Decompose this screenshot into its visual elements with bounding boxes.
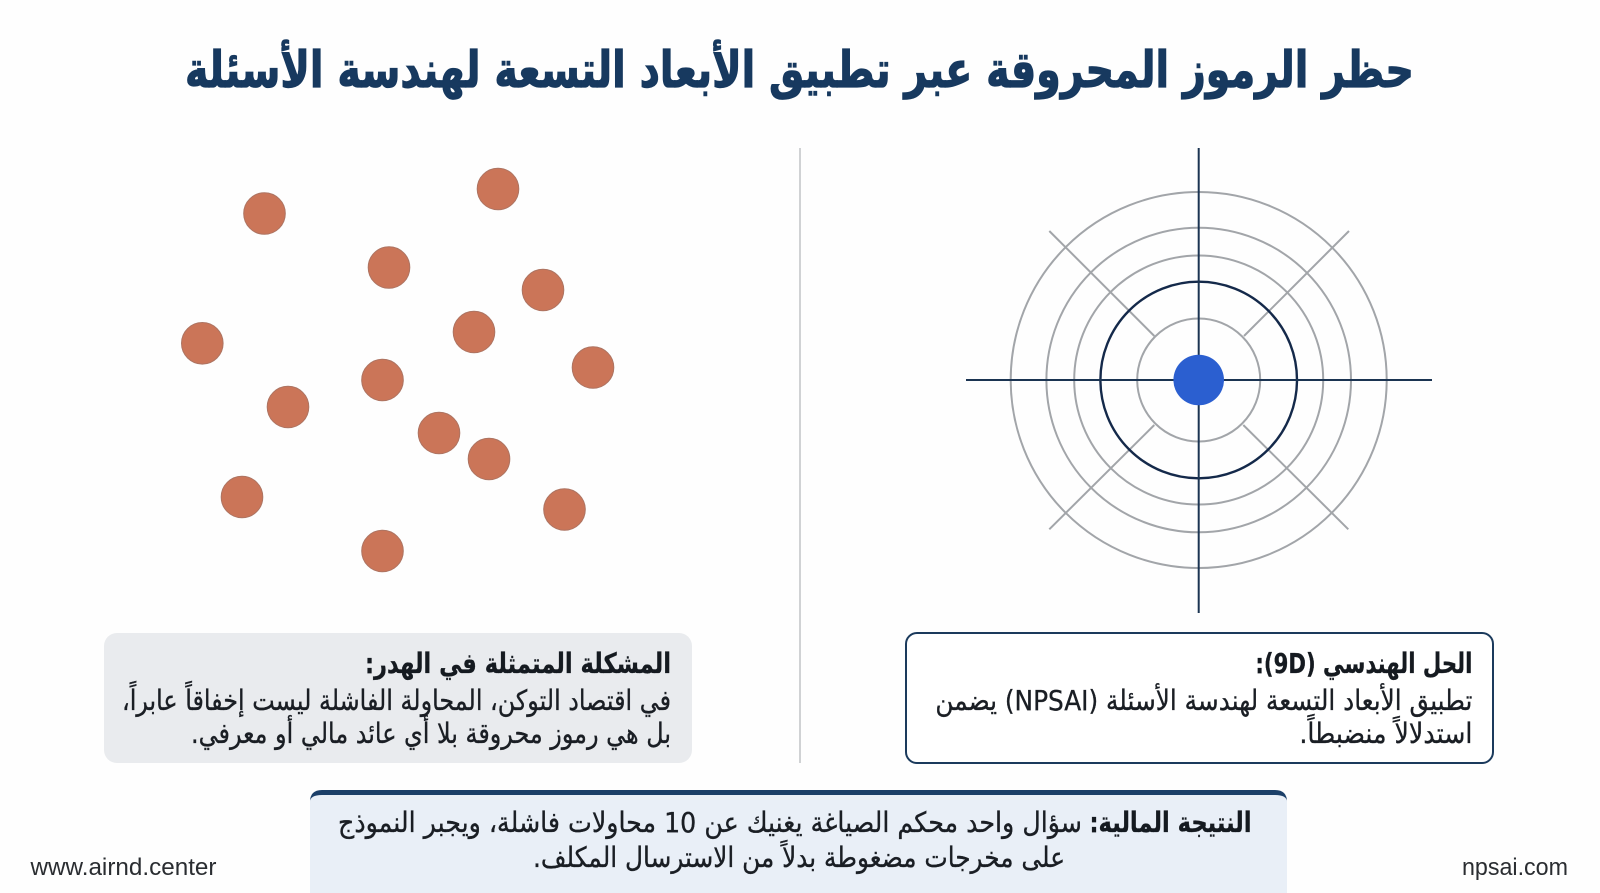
problem text line 2: بل هي رموز محروقة بلا أي عائد مالي أو معرفي.	[191, 714, 671, 750]
icon: blue centre point	[1173, 355, 1224, 405]
panel: the problem	[104, 633, 692, 763]
solution text line 2: استدلالاً منضبطاً.	[1299, 713, 1472, 750]
result text line 2: على مخرجات مضغوطة بدلاً من الاسترسال المكلف.	[533, 839, 1065, 874]
panel: the engineering solution	[906, 633, 1493, 763]
chart: nine dimension target	[966, 148, 1432, 613]
result label: النتيجة المالية:	[1090, 806, 1252, 839]
solution text line 1: تطبيق الأبعاد التسعة لهندسة الأسئلة (NPSAI) يضمن	[935, 682, 1472, 717]
problem heading: المشكلة المتمثلة في الهدر:	[365, 647, 671, 680]
footer left url: www.airnd.center	[29, 854, 217, 881]
problem text line 1: في اقتصاد التوكن، المحاولة الفاشلة ليست إخفاقاً عابراً،	[122, 680, 671, 717]
footer right url: npsai.com	[1462, 854, 1568, 881]
divider between panels	[799, 148, 801, 763]
solution heading: الحل الهندسي (9D):	[1255, 647, 1472, 680]
chart: scattered burnt token dots	[182, 168, 614, 572]
result text line 1: سؤال واحد محكم الصياغة يغنيك عن 10 محاولات فاشلة، ويجبر النموذج	[338, 806, 1082, 840]
panel: financial result	[310, 790, 1287, 893]
